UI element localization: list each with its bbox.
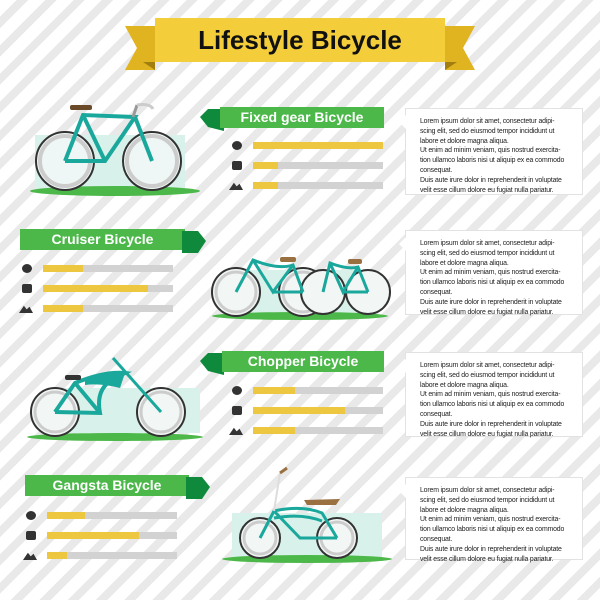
bike: cruisers (211, 257, 391, 320)
text box 1: Ut enim ad minim veniam, quis nostrud exercita- (420, 147, 560, 154)
text box 1: Lorem ipsum dolor sit amet, consectetur adipi- (420, 118, 554, 125)
text box 3: Duis aute irure dolor in reprehenderit in voluptate (420, 421, 562, 428)
text box 1: labore et dolore magna aliqua. (420, 138, 509, 145)
label: gangsta (25, 475, 210, 499)
text box 2: consequat. (420, 289, 452, 296)
text box 3: consequat. (420, 411, 452, 418)
text box 3: Ut enim ad minim veniam, quis nostrud exercita- (420, 391, 560, 398)
label: chopper: Chopper Bicycle (248, 353, 358, 369)
text box 3: velit esse cillum dolore eu fugiat nulla pariatur. (420, 431, 553, 438)
text box 1: velit esse cillum dolore eu fugiat nulla pariatur. (420, 187, 553, 194)
text box 3 (405, 352, 583, 437)
text box 4: Duis aute irure dolor in reprehenderit in voluptate (420, 546, 562, 553)
text box 3: Lorem ipsum dolor sit amet, consectetur adipi- (420, 362, 554, 369)
panel: fixed gear (30, 103, 384, 196)
text box 2: Ut enim ad minim veniam, quis nostrud exercita- (420, 269, 560, 276)
text box 4: scing elit, sed do eiusmod tempor incididunt ut (420, 497, 554, 504)
label: fixed gear (200, 107, 384, 131)
stat bars: cruiser (19, 264, 173, 313)
text box 4 (405, 477, 583, 560)
text box 2: labore et dolore magna aliqua. (420, 260, 509, 267)
stat bars: chopper (229, 386, 383, 435)
label: fixed gear: Fixed gear Bicycle (241, 109, 363, 125)
label: cruiser (20, 229, 206, 253)
bike: chopper (27, 357, 203, 441)
panel: gangsta (23, 466, 392, 563)
text box 4: labore et dolore magna aliqua. (420, 507, 509, 514)
text box 2: scing elit, sed do eiusmod tempor incididunt ut (420, 250, 554, 257)
text box 2: Duis aute irure dolor in reprehenderit in voluptate (420, 299, 562, 306)
stat bars: gangsta (23, 511, 177, 560)
text box 2 (405, 230, 583, 315)
text box 3: labore et dolore magna aliqua. (420, 382, 509, 389)
text box 4: consequat. (420, 536, 452, 543)
text box 4: tion ullamco laboris nisi ut aliquip ex ea commodo (420, 526, 564, 533)
text box 4: Lorem ipsum dolor sit amet, consectetur adipi- (420, 487, 554, 494)
text box 1 (405, 108, 583, 195)
label: cruiser: Cruiser Bicycle (52, 231, 153, 247)
title text: Lifestyle Bicycle (198, 25, 402, 55)
text box 2: velit esse cillum dolore eu fugiat nulla pariatur. (420, 309, 553, 316)
bike: fixed gear (30, 103, 200, 196)
text box 1: consequat. (420, 167, 452, 174)
text box 1: tion ullamco laboris nisi ut aliquip ex ea commodo (420, 157, 564, 164)
panel: chopper (27, 351, 384, 441)
stat bars: fixed gear (229, 141, 383, 190)
panel: cruiser (19, 229, 391, 320)
text box 1: Duis aute irure dolor in reprehenderit in voluptate (420, 177, 562, 184)
title banner (125, 18, 475, 70)
label: gangsta: Gangsta Bicycle (53, 477, 161, 493)
bike: gangsta (222, 466, 392, 563)
text box 2: tion ullamco laboris nisi ut aliquip ex ea commodo (420, 279, 564, 286)
text box 4: Ut enim ad minim veniam, quis nostrud exercita- (420, 516, 560, 523)
label: chopper (200, 351, 384, 375)
text box 2: Lorem ipsum dolor sit amet, consectetur adipi- (420, 240, 554, 247)
text box 4: velit esse cillum dolore eu fugiat nulla pariatur. (420, 556, 553, 563)
text box 3: tion ullamco laboris nisi ut aliquip ex ea commodo (420, 401, 564, 408)
text box 3: scing elit, sed do eiusmod tempor incididunt ut (420, 372, 554, 379)
text box 1: scing elit, sed do eiusmod tempor incididunt ut (420, 128, 554, 135)
